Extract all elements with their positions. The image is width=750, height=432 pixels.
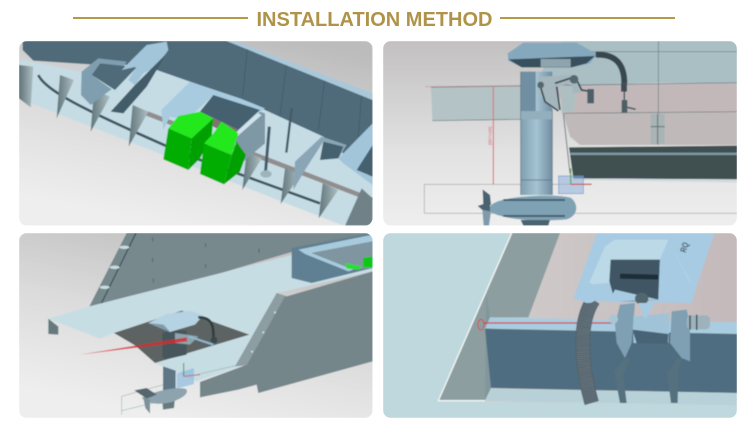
console at back <box>292 233 373 283</box>
dimension label: (857×100) <box>488 126 493 145</box>
motor head <box>508 43 597 67</box>
panel: boat hull with green battery boxes <box>19 41 373 226</box>
red line <box>80 337 187 355</box>
dark hull stringer <box>38 75 320 203</box>
transom face <box>485 329 737 393</box>
coordinate box <box>559 176 583 194</box>
cable <box>596 55 624 83</box>
motor head bracket <box>573 233 714 303</box>
deck left <box>383 233 737 418</box>
propeller pod <box>490 196 576 220</box>
near side hull <box>200 271 373 397</box>
coordinate box <box>177 368 194 389</box>
bracket <box>538 75 583 110</box>
hull dark stripes <box>569 146 737 179</box>
clamp assembly <box>609 293 710 361</box>
brand mark: RQ <box>678 241 691 254</box>
aft console <box>293 137 347 190</box>
red dimension lines <box>492 86 494 184</box>
angled side wall <box>439 233 560 401</box>
clamp levers <box>614 359 682 403</box>
inner wall <box>23 41 373 187</box>
fender <box>651 114 665 144</box>
panel: close-up of bracket bolt on transom <box>383 233 737 418</box>
top rim <box>227 41 373 100</box>
motor mount <box>162 330 187 360</box>
panel: motor side view with dimensions <box>383 41 737 226</box>
central console <box>161 82 265 130</box>
far side hull <box>89 233 373 310</box>
stanchions <box>265 127 269 174</box>
motor lower shaft <box>163 366 176 393</box>
motor shaft <box>521 72 552 195</box>
green battery boxes <box>163 112 246 184</box>
panel: stern perspective with motor in well <box>19 233 373 418</box>
motor well <box>114 311 249 363</box>
propeller pod <box>142 388 187 404</box>
corrugated hose <box>583 300 593 403</box>
red axis line <box>478 319 613 330</box>
title: INSTALLATION METHOD <box>256 9 492 31</box>
hull ribs <box>19 65 33 107</box>
forward console <box>81 58 127 105</box>
deck <box>19 59 373 226</box>
floor strip <box>485 389 737 405</box>
deck <box>48 255 373 381</box>
motor head <box>148 311 203 332</box>
transom top <box>485 317 737 334</box>
boat outline upper <box>542 41 737 85</box>
